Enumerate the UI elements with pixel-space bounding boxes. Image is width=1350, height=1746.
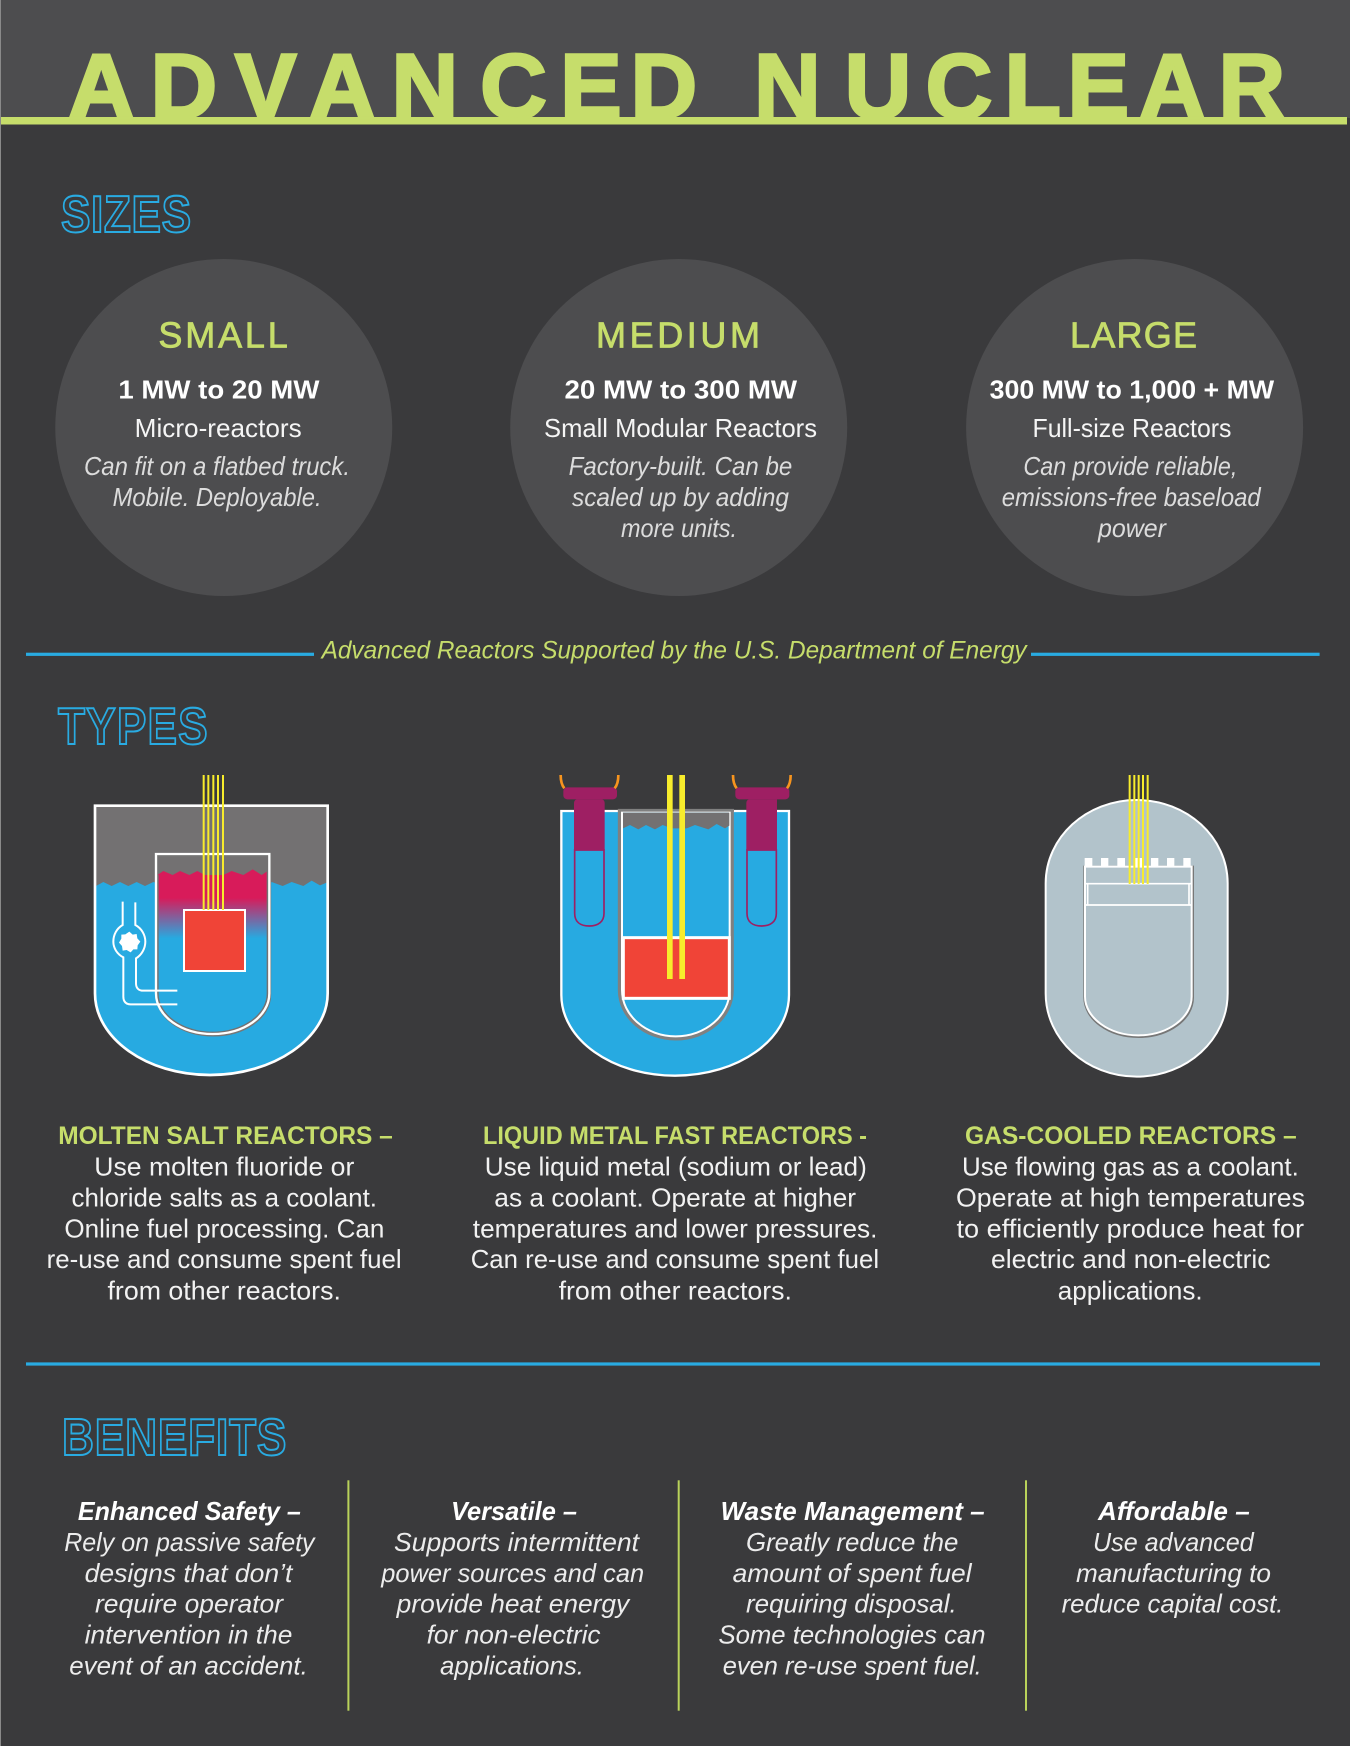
benefit: waste management: Greatly reduce the xyxy=(746,1527,958,1557)
panel: medium: 20 MW to 300 MW xyxy=(564,374,798,404)
heading: types: TYPES xyxy=(58,698,208,756)
text: molten salt reactors: MOLTEN SALT REACTORS – xyxy=(58,1122,393,1150)
heading: benefits: BENEFITS xyxy=(62,1409,286,1467)
panel: medium: scaled up by adding xyxy=(572,482,789,512)
benefit: waste management xyxy=(718,1496,986,1680)
benefit: affordable: reduce capital cost. xyxy=(1062,1589,1283,1619)
benefit: enhanced safety: event of an accident. xyxy=(69,1650,308,1680)
text: liquid metal fast reactors: as a coolant. Operate at higher xyxy=(494,1183,856,1213)
subheading: supported by DOE: Advanced Reactors Supported by the U.S. Department of Energy xyxy=(320,636,1028,664)
benefit: affordable: Use advanced xyxy=(1093,1527,1255,1557)
text: gas-cooled reactors: electric and non-electric xyxy=(991,1244,1270,1274)
benefit: enhanced safety: intervention in the xyxy=(85,1620,292,1650)
control rods xyxy=(1130,775,1148,884)
panel: medium: Small Modular Reactors xyxy=(544,413,817,443)
panel: small: Can fit on a flatbed truck. xyxy=(84,451,350,481)
benefit: enhanced safety: Rely on passive safety xyxy=(64,1527,317,1557)
benefit: affordable xyxy=(1062,1496,1283,1619)
panel: large: power xyxy=(1097,513,1167,543)
panel: medium: MEDIUM xyxy=(596,314,760,355)
text: liquid metal fast reactors: temperatures and lower pressures. xyxy=(473,1213,877,1243)
panel: large: LARGE xyxy=(1070,314,1197,355)
panel: small xyxy=(55,259,392,596)
text: gas-cooled reactors: applications. xyxy=(1058,1275,1203,1305)
pump and pipes xyxy=(113,902,177,1004)
text: molten salt reactors: Use molten fluoride or xyxy=(94,1152,355,1182)
benefit: waste management: even re-use spent fuel. xyxy=(723,1650,982,1680)
panel: medium xyxy=(510,259,847,596)
core xyxy=(184,910,245,971)
panel: large: emissions-free baseload xyxy=(1002,482,1262,512)
benefit: waste management: Waste Management – xyxy=(721,1496,985,1526)
section: benefits xyxy=(62,1409,1283,1711)
text: molten salt reactors: Online fuel processing. Can xyxy=(64,1213,384,1243)
heading: sizes: SIZES xyxy=(61,186,191,244)
control rods xyxy=(667,775,685,979)
panel: small: Micro-reactors xyxy=(135,413,302,443)
control rods xyxy=(204,775,223,910)
text: gas-cooled reactors: to efficiently produce heat for xyxy=(956,1213,1304,1243)
benefit: versatile: power sources and can xyxy=(380,1558,644,1588)
text: liquid metal fast reactors xyxy=(471,1122,879,1305)
benefit: versatile: provide heat energy xyxy=(396,1589,631,1619)
diagram: molten salt reactor xyxy=(95,775,328,1075)
panel: small: Mobile. Deployable. xyxy=(113,482,322,512)
heat exchanger right xyxy=(733,775,791,926)
text: molten salt reactors: chloride salts as a coolant. xyxy=(72,1183,377,1213)
benefit: waste management: requiring disposal. xyxy=(746,1589,957,1619)
text: gas-cooled reactors xyxy=(956,1122,1305,1305)
panel: medium: more units. xyxy=(621,513,737,543)
heat exchanger left xyxy=(561,775,618,926)
text: molten salt reactors xyxy=(47,1122,402,1305)
benefit: affordable: manufacturing to xyxy=(1076,1558,1271,1588)
panel: large xyxy=(966,259,1303,596)
panel: small: 1 MW to 20 MW xyxy=(118,374,320,404)
diagram: gas-cooled reactor xyxy=(1046,775,1228,1077)
text: gas-cooled reactors: Operate at high temperatures xyxy=(956,1183,1305,1213)
title: ADVANCED NUCLEAR xyxy=(68,36,1285,138)
benefit: waste management: amount of spent fuel xyxy=(733,1558,973,1588)
text: liquid metal fast reactors: Can re-use and consume spent fuel xyxy=(471,1244,879,1274)
text: molten salt reactors: from other reactors. xyxy=(108,1275,341,1305)
benefit: enhanced safety: require operator xyxy=(95,1589,284,1619)
benefit: versatile: Versatile – xyxy=(451,1496,577,1526)
core xyxy=(623,938,729,998)
panel: large: Full-size Reactors xyxy=(1032,413,1232,443)
benefit: versatile: applications. xyxy=(440,1650,584,1680)
panel: large: 300 MW to 1,000 + MW xyxy=(990,374,1275,404)
text: molten salt reactors: re-use and consume spent fuel xyxy=(47,1244,402,1274)
section: sizes xyxy=(55,186,1303,596)
benefit: affordable: Affordable – xyxy=(1097,1496,1250,1526)
text: gas-cooled reactors: GAS-COOLED REACTORS – xyxy=(965,1122,1297,1150)
benefit: versatile xyxy=(380,1496,644,1680)
benefit: versatile: for non-electric xyxy=(427,1620,601,1650)
text: liquid metal fast reactors: from other reactors. xyxy=(559,1275,792,1305)
diagram: liquid metal fast reactor xyxy=(561,775,791,1076)
text: liquid metal fast reactors: Use liquid metal (sodium or lead) xyxy=(485,1152,867,1182)
benefit: enhanced safety: Enhanced Safety – xyxy=(78,1496,301,1526)
benefit: versatile: Supports intermittent xyxy=(394,1527,641,1557)
header band xyxy=(1,0,1350,138)
benefit: waste management: Some technologies can xyxy=(718,1620,986,1650)
panel: large: Can provide reliable, xyxy=(1023,451,1237,481)
panel: small: SMALL xyxy=(158,314,288,355)
section: types xyxy=(47,698,1305,1305)
benefit: enhanced safety xyxy=(64,1496,317,1680)
text: liquid metal fast reactors: LIQUID METAL FAST REACTORS - xyxy=(483,1122,867,1150)
text: gas-cooled reactors: Use flowing gas as a coolant. xyxy=(962,1152,1299,1182)
panel: medium: Factory-built. Can be xyxy=(569,451,792,481)
benefit: enhanced safety: designs that don’t xyxy=(85,1558,294,1588)
